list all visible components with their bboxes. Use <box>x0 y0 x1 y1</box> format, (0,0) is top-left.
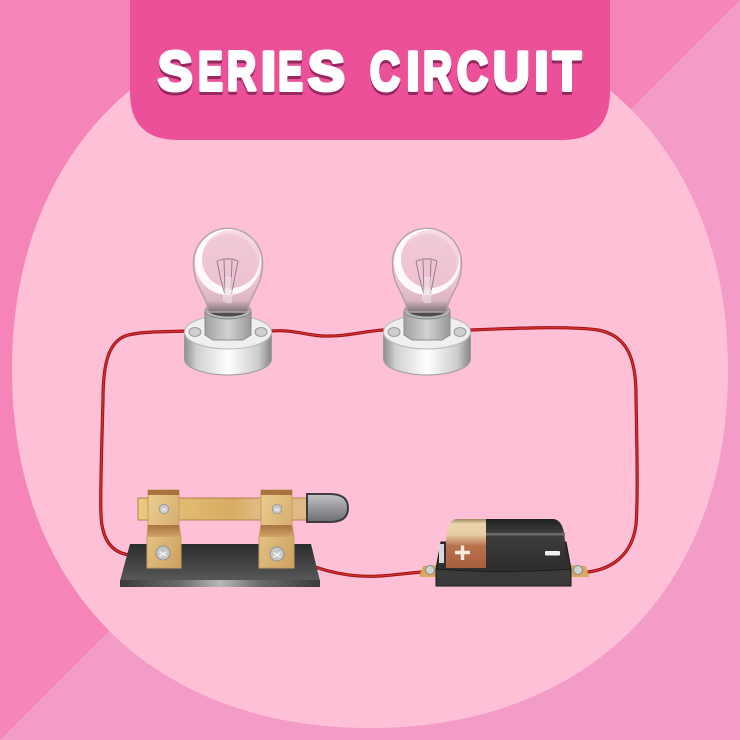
title: Series Circuit: I <box>261 40 276 102</box>
title: Series Circuit <box>158 40 581 102</box>
switch base board <box>120 544 320 587</box>
title banner <box>130 0 610 140</box>
battery <box>419 519 589 586</box>
title: Series Circuit: R <box>423 40 452 102</box>
title: Series Circuit: I <box>406 40 420 102</box>
title: Series Circuit: U <box>493 40 530 102</box>
icon: lamp glass <box>392 228 462 312</box>
title: Series Circuit: S <box>158 40 192 102</box>
bulb 2 <box>384 228 470 375</box>
icon: lamp holder <box>184 303 272 375</box>
title: Series Circuit: I <box>534 40 548 102</box>
battery terminals <box>419 565 589 577</box>
icon: lamp glass <box>194 228 262 312</box>
minus sign <box>545 551 560 556</box>
title: Series Circuit: T <box>553 40 581 102</box>
icon: lamp holder <box>384 303 470 375</box>
title: Series Circuit: S <box>308 40 345 102</box>
left clamp <box>147 490 181 568</box>
title: Series Circuit: C <box>457 40 488 102</box>
circuit wires <box>101 328 637 576</box>
battery holder <box>436 542 571 586</box>
title: Series Circuit: E <box>278 40 303 102</box>
switch lever <box>138 494 348 522</box>
right clamp <box>259 490 294 568</box>
bulb 1 <box>184 228 272 375</box>
title: Series Circuit: R <box>227 40 256 102</box>
knife switch <box>120 490 348 587</box>
battery body <box>486 519 565 568</box>
title: Series Circuit: E <box>198 40 223 102</box>
title: Series Circuit: C <box>370 40 400 102</box>
battery positive cap <box>446 519 486 568</box>
plus sign <box>455 546 470 560</box>
